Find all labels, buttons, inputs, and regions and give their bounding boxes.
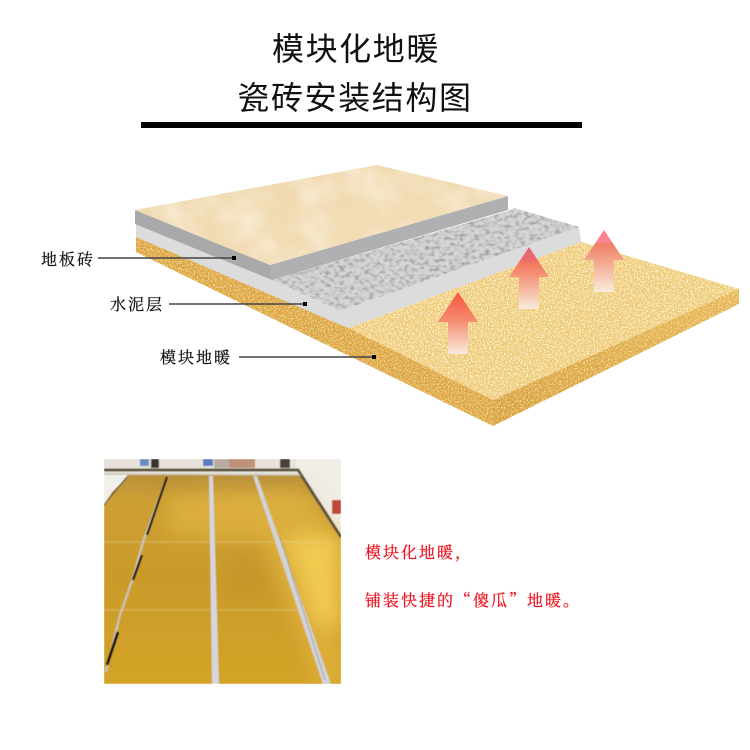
heat arrow 3 [584,230,624,292]
photo frame edge [104,470,341,537]
caption line 1: 模块化地暖， [365,540,473,563]
photo bright reflections [170,490,341,684]
heat arrow 2 [509,247,549,309]
heat arrow 1 [438,292,478,354]
layer: module heating top surface [348,242,739,400]
photo horizontal joints [104,541,330,543]
photo gold floor [104,475,341,684]
photo: installed module floor [104,459,341,684]
title underline bar [141,122,582,128]
label: module heating: 模块地暖 [160,345,232,368]
label: cement layer [110,292,307,315]
layer: tile left side [135,210,272,280]
layer: cement side [136,224,581,328]
title line 2: 瓷砖安装结构图 [237,80,473,116]
label: module heating [160,345,376,368]
label: cement layer: 水泥层 [110,292,164,315]
layer: tile right side [270,196,508,280]
title [237,31,473,116]
layer: module heating left side [136,237,493,426]
photo background wall [104,459,341,468]
layer: cement gravel surface [272,208,579,311]
label: floor tile: 地板砖 [41,247,95,270]
layer: tile top surface [135,165,508,265]
photo seams [106,477,167,672]
layered floor diagram [135,165,739,426]
layer: module heating right side [493,289,739,426]
label: floor tile [41,247,236,270]
caption [365,540,581,611]
title line 1: 模块化地暖 [272,31,440,67]
caption line 2: 铺装快捷的“傻瓜”地暖。 [365,588,581,611]
